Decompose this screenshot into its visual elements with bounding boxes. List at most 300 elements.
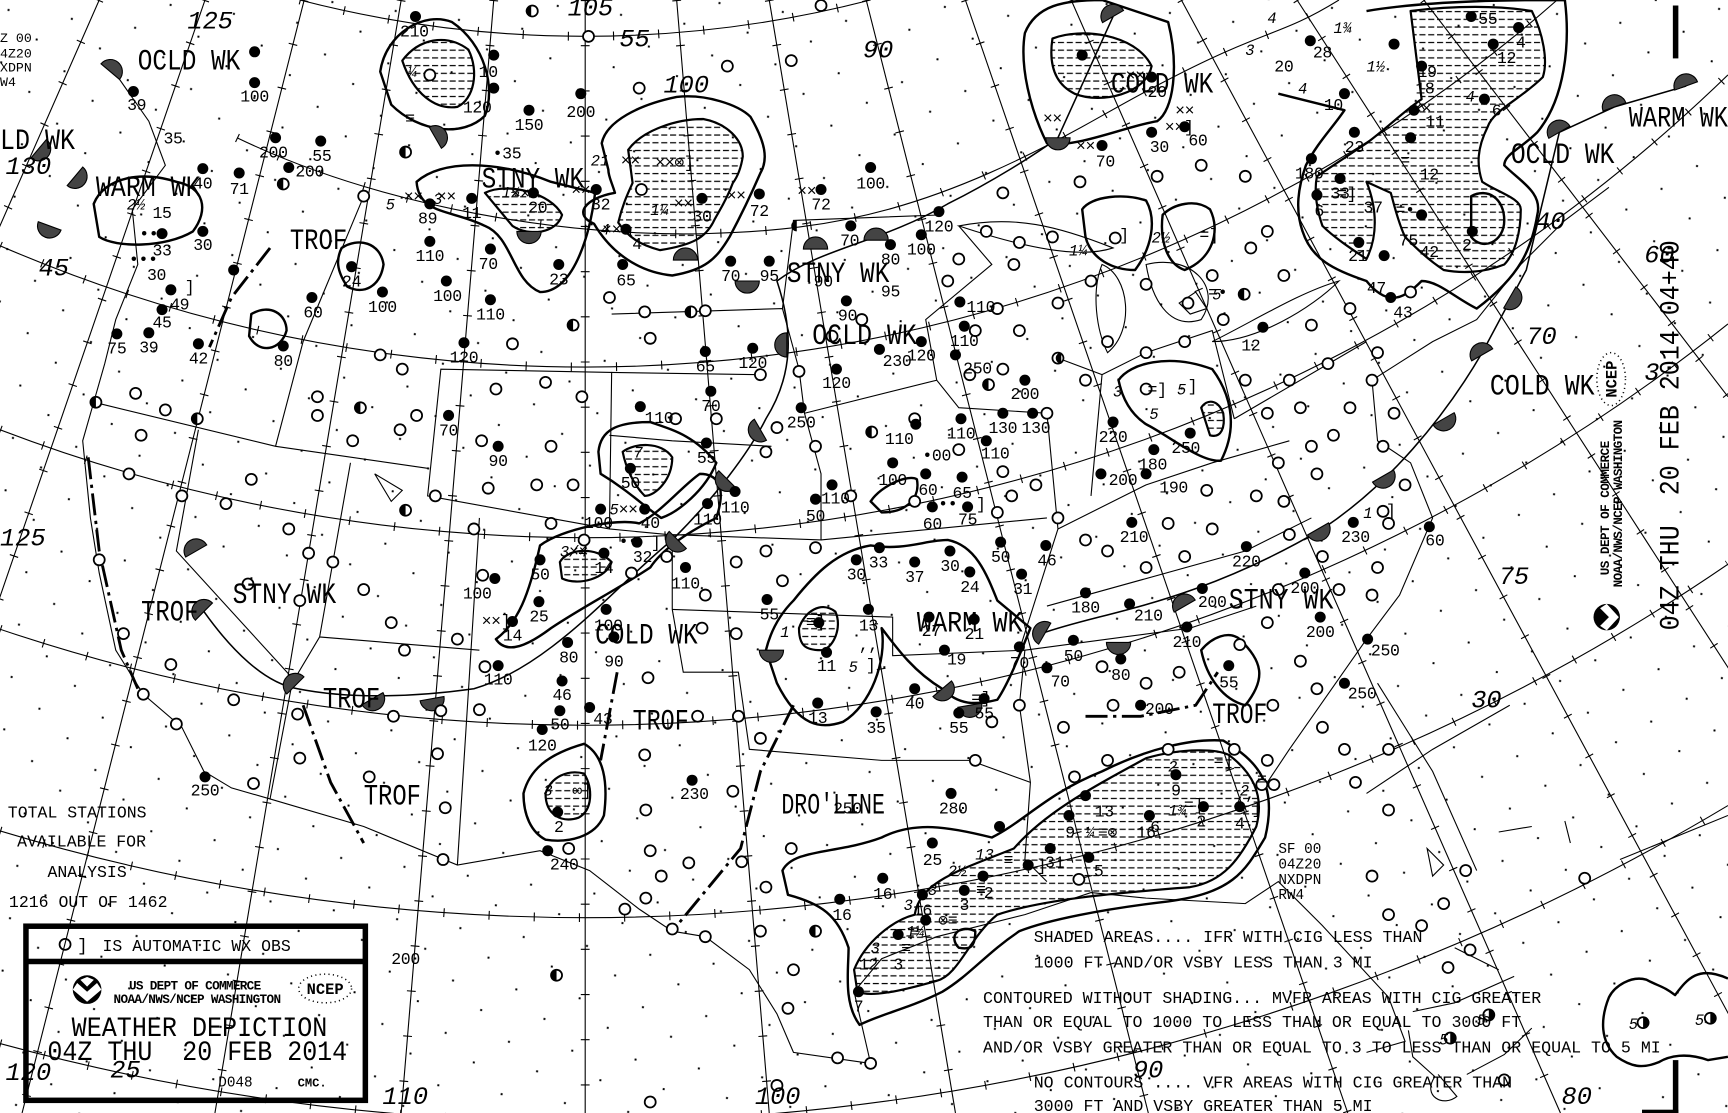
station value labels: 19: [1418, 63, 1437, 82]
station value labels: 23: [549, 270, 568, 289]
map legend notes: AND/OR VSBY GREATER THAN OR EQUAL TO 3 TO LESS THAN OR EQUAL TO 5 MI: [983, 1038, 1661, 1057]
station value labels: 55: [697, 449, 716, 468]
station value labels: 4: [632, 235, 642, 254]
degree labels: 30: [1471, 686, 1502, 715]
station value labels: 20: [528, 199, 547, 218]
weather symbols: ××: [511, 184, 530, 203]
station value labels: 40: [193, 174, 212, 193]
station value labels: 21: [1348, 247, 1368, 266]
small fractional visibility labels: 21: [591, 152, 609, 170]
station value labels: 130: [1022, 419, 1050, 438]
weather symbols: ]: [651, 534, 661, 553]
small fractional visibility labels: 3: [433, 191, 442, 209]
station value labels: 49: [170, 296, 189, 315]
station value labels: 6: [1492, 102, 1501, 121]
station value labels: 110: [721, 498, 749, 517]
stations available text: [8, 804, 167, 912]
station value labels: 75: [958, 511, 977, 530]
station value labels: 65: [952, 484, 972, 503]
station value labels: 240: [550, 855, 579, 874]
station value labels: 70: [701, 397, 720, 416]
station value labels: 30: [1150, 138, 1169, 157]
weather symbols: ××: [727, 187, 746, 206]
station value labels: 80: [274, 352, 293, 371]
small fractional visibility labels: 2½: [1152, 229, 1171, 247]
station value labels: 72: [750, 202, 769, 221]
station value labels: 89: [418, 210, 437, 229]
station value labels: 220: [1232, 552, 1261, 571]
station value labels: 230: [1341, 528, 1370, 547]
weather symbols: ××: [571, 181, 590, 200]
station value labels: 120: [450, 349, 478, 368]
degree labels: 90: [1133, 1057, 1163, 1086]
station value labels: 25: [923, 851, 942, 870]
degree labels: 45: [39, 254, 69, 283]
station value labels: 120: [738, 354, 767, 373]
station value labels: 71: [230, 180, 249, 199]
station value labels: 16: [1137, 824, 1156, 843]
analysis labels: OCLD WK: [138, 44, 240, 78]
station value labels: 55: [975, 704, 994, 723]
station value labels: 60: [1425, 531, 1444, 550]
station value labels: 13: [808, 709, 827, 728]
station value labels: 70: [840, 232, 859, 251]
degree labels: 60: [1644, 241, 1675, 270]
stations available text: 1216 OUT OF 1462: [9, 893, 167, 912]
map legend notes: [983, 928, 1661, 1113]
station value labels: 90: [604, 653, 623, 672]
station value labels: 20: [1148, 83, 1167, 102]
weather symbols: =•: [1395, 201, 1415, 220]
station value labels: 31: [1013, 580, 1033, 599]
station value labels: 16: [832, 906, 852, 925]
station value labels: 210: [400, 22, 429, 41]
degree labels: 130: [6, 153, 51, 182]
station value labels: 40: [905, 695, 924, 714]
analysis labels: TROF: [290, 224, 347, 258]
map legend notes: NO CONTOURS .... VFR AREAS WITH CIG GREATER THAN: [1034, 1074, 1512, 1093]
station value labels: 55: [1478, 10, 1497, 29]
small fractional visibility labels: 2½: [948, 863, 967, 881]
station value labels: 12: [1497, 49, 1516, 68]
weather symbols: [129, 66, 1431, 958]
analysis labels: COLD WK: [1490, 370, 1595, 404]
weather symbols: ××: [621, 151, 640, 170]
station value labels: 110: [476, 306, 505, 325]
station value labels: 42: [189, 350, 208, 369]
rotated agency text: NOAA/NWS/NCEP WASHINGTON: [1611, 420, 1626, 587]
small fractional visibility labels: 2½: [127, 196, 146, 214]
station value labels: 42: [1420, 243, 1439, 262]
small fractional visibility labels: 1½: [1367, 59, 1386, 77]
weather symbols: ]: [1119, 226, 1129, 245]
station value labels: 33: [152, 242, 172, 261]
station value labels: 180: [1295, 165, 1324, 184]
small fractional visibility labels: 7: [634, 444, 644, 462]
station value labels: 70: [721, 267, 740, 286]
weather symbols: ××: [619, 501, 638, 520]
weather symbols: =]: [971, 689, 990, 708]
station value labels: 45: [152, 313, 172, 332]
small fractional visibility labels: 2: [1240, 783, 1249, 801]
weather symbols: ••: [139, 225, 158, 244]
agency text: US DEPT OF COMMERCE: [129, 979, 262, 994]
station value labels: 2: [1196, 812, 1206, 831]
small fractional visibility labels: 2: [1168, 758, 1177, 776]
small fractional visibility labels: 1: [1363, 505, 1372, 523]
station value labels: 7: [854, 998, 863, 1017]
station value labels: 43: [1393, 303, 1412, 322]
small fractional visibility labels: 1¼: [1069, 243, 1087, 261]
degree labels: 120: [6, 1059, 51, 1088]
station value labels: 35: [163, 129, 183, 148]
weather symbols: ,,: [1236, 785, 1255, 804]
rotated agency text: [1598, 420, 1626, 587]
station value labels: 200: [566, 103, 595, 122]
top-left map stamp: 4Z20: [0, 46, 32, 61]
weather symbols: ]: [1386, 502, 1396, 521]
analysis labels: OCLD WK: [1511, 138, 1615, 172]
small fractional visibility labels: 3: [1113, 384, 1122, 402]
weather symbols: ]: [976, 495, 986, 514]
station value labels: 230: [680, 785, 709, 804]
station value labels: 9: [1065, 824, 1075, 843]
station value labels: 39: [139, 339, 158, 358]
station value labels: 250: [787, 414, 816, 433]
station value labels: 13: [1095, 803, 1114, 822]
analysis labels: STNY WK: [787, 257, 889, 291]
weather symbols: ••: [619, 533, 638, 552]
degree labels: 125: [0, 524, 46, 553]
degree labels: 25: [110, 1057, 141, 1086]
station value labels: 210: [1173, 633, 1201, 652]
small fractional visibility labels: 5: [386, 196, 395, 214]
station value labels: 33: [869, 554, 888, 573]
station value labels: 200: [1011, 385, 1039, 404]
small fractional visibility labels: 1¾: [1333, 20, 1353, 38]
station value labels: 70: [1096, 152, 1115, 171]
station value labels: 90: [489, 452, 508, 471]
filled stations: [111, 11, 1524, 997]
weather symbols: ××: [602, 221, 621, 240]
small fractional visibility labels: 4: [1267, 10, 1277, 28]
top-left map stamp: Z 00: [0, 31, 32, 46]
station value labels: 60: [303, 303, 323, 322]
station value labels: 2: [1462, 236, 1472, 255]
station value labels: 55: [949, 719, 968, 738]
station value labels: 24: [342, 273, 362, 292]
small fractional visibility labels: 5: [1439, 1032, 1448, 1050]
weather symbols: ≡: [1004, 851, 1013, 870]
station value labels: 110: [966, 298, 995, 317]
analysis labels: COLD WK: [1111, 68, 1213, 102]
weather symbols: ≡: [910, 923, 919, 942]
station value labels: 110: [693, 511, 722, 530]
station value labels: 30: [193, 236, 212, 255]
degree labels: 90: [863, 36, 893, 65]
station value labels: 55: [760, 605, 779, 624]
station value labels: 190: [1159, 479, 1188, 498]
weather symbols: =: [1400, 151, 1410, 170]
station value labels: 47: [1367, 279, 1386, 298]
station value labels: 110: [885, 430, 914, 449]
station value labels: 180: [1138, 455, 1167, 474]
map legend notes: 1000 FT AND/OR VSBY LESS THAN 3 MI: [1034, 954, 1373, 973]
station value labels: 33: [1330, 184, 1350, 203]
stations available text: ANALYSIS: [47, 863, 127, 882]
station value labels: 110: [947, 425, 975, 444]
station value labels: 50: [806, 507, 825, 526]
station value labels: 100: [584, 514, 613, 533]
small fractional visibility labels: 5: [1212, 287, 1221, 305]
map stamp SF: 04Z20: [1278, 857, 1321, 873]
weather symbols: ××: [569, 542, 588, 561]
station value labels: 12: [859, 956, 878, 975]
chart date: 04Z THU 20 FEB 2014: [47, 1038, 347, 1069]
weather symbols: •••: [129, 250, 158, 269]
map stamp SF: SF 00: [1278, 842, 1321, 858]
small fractional visibility labels: 5: [609, 502, 619, 520]
weather symbols: ××: [1043, 109, 1062, 128]
icon: NOAA logo: [73, 975, 101, 1004]
station value labels: 100: [856, 174, 885, 193]
station value labels: 12: [1241, 336, 1260, 355]
weather symbols: ××: [1076, 137, 1095, 156]
station value labels: 70: [439, 421, 458, 440]
map stamp SF: RW4: [1278, 888, 1304, 904]
station value labels: 110: [645, 409, 673, 428]
station value labels: 70: [479, 255, 498, 274]
station value labels: 200: [295, 162, 324, 181]
rotated chart date: 04Z THU 20 FEB 2014 04+40: [1656, 240, 1687, 630]
station value labels: 24: [960, 578, 980, 597]
station value labels: 46: [1037, 551, 1057, 570]
weather symbols: ≡: [1257, 771, 1267, 790]
station value labels: 70: [1010, 654, 1029, 673]
station value labels: 4: [1516, 33, 1526, 52]
station value labels: 90: [838, 307, 857, 326]
small fractional visibility labels: 4: [601, 222, 610, 240]
analysis labels: OCLD WK: [812, 319, 917, 353]
map legend notes: SHADED AREAS.... IFR WITH CIG LESS THAN: [1034, 928, 1422, 947]
station value labels: 37: [905, 568, 924, 587]
station value labels: 250: [833, 799, 862, 818]
degree labels: 3: [1644, 359, 1659, 388]
weather symbols: ××: [674, 194, 693, 213]
station value labels: 11: [462, 204, 482, 223]
icon: NCEP badge: NCEP: [307, 981, 344, 999]
agency text: NOAA/NWS/NCEP WASHINGTON: [114, 992, 281, 1007]
stations available text: AVAILABLE FOR: [17, 832, 146, 851]
station value labels: 95: [760, 267, 779, 286]
analysis labels: COLD WK: [595, 619, 698, 653]
weather symbols: =•: [1208, 284, 1227, 303]
small fractional visibility labels: ¼: [408, 64, 417, 82]
station value labels: 21: [965, 625, 984, 644]
degree labels: 55: [619, 25, 650, 54]
station value labels: 100: [240, 87, 269, 106]
station value labels: 11: [817, 657, 837, 676]
small fractional visibility labels: 3: [928, 882, 937, 900]
station value labels: 250: [1348, 685, 1376, 704]
station value labels: 120: [463, 98, 492, 117]
weather symbols: =]: [1337, 184, 1356, 203]
weather symbols: ××]: [482, 612, 510, 631]
station value labels: 100: [368, 298, 397, 317]
station value labels: 30: [940, 557, 960, 576]
station value labels: 23: [1345, 138, 1364, 157]
small fractional visibility labels: 1¼: [906, 924, 924, 942]
small fractional visibility labels: 3: [871, 940, 880, 958]
degree labels: 100: [755, 1083, 801, 1112]
station value labels: 150: [515, 116, 543, 135]
station value labels: 15: [152, 204, 172, 223]
degree labels: 75: [1499, 563, 1529, 592]
station value labels: 43: [593, 710, 612, 729]
weather symbols: ]: [1188, 377, 1197, 396]
degree labels: 100: [663, 72, 709, 101]
station value labels: 75: [107, 340, 126, 359]
weather symbols: ,,: [859, 636, 878, 655]
analysis labels: DRO'LINE: [781, 788, 885, 822]
station value labels: 72: [811, 195, 831, 214]
station value labels: 50: [550, 716, 569, 735]
station value labels: 120: [925, 217, 953, 236]
station value labels: 210: [1120, 528, 1148, 547]
station value labels: 11: [1425, 113, 1445, 132]
analysis labels: TROF: [141, 595, 198, 629]
station value labels: 30: [692, 207, 712, 226]
weather symbols: ≡: [901, 939, 911, 958]
weather symbols: ∞]: [572, 782, 591, 801]
analysis labels: TROF: [323, 682, 380, 716]
station value labels: 210: [1134, 606, 1163, 625]
station value labels: 14: [503, 626, 522, 645]
small fractional visibility labels: 5: [1695, 1012, 1704, 1030]
small fractional visibility labels: 5: [1629, 1016, 1638, 1034]
station value labels: 65: [696, 357, 715, 376]
station value labels: 200: [259, 144, 288, 163]
station value labels: 250: [191, 782, 219, 801]
station value labels: 30: [147, 266, 166, 285]
IFR shaded areas: [402, 7, 1545, 994]
station value labels: 3: [893, 956, 903, 975]
analysis labels: TROF: [633, 705, 689, 739]
chart title: WEATHER DEPICTION: [72, 1014, 327, 1045]
station value labels: 100: [463, 584, 492, 603]
station value labels: 9: [1171, 782, 1181, 801]
station value labels: 200: [1198, 593, 1227, 612]
map legend notes: CONTOURED WITHOUT SHADING... MVFR AREAS WITH CIG GREATER: [983, 989, 1541, 1008]
station value labels: 14: [594, 559, 614, 578]
weather symbols: ××: [437, 188, 456, 207]
station value labels: 20: [1274, 58, 1293, 77]
automatic obs key: ]: [77, 937, 88, 957]
map legend notes: THAN OR EQUAL TO 1000 TO LESS THAN OR EQUAL TO 3000 FT: [983, 1013, 1521, 1032]
agency text: [114, 979, 281, 1007]
station value labels: 19: [947, 650, 966, 669]
station value labels: 100: [433, 287, 462, 306]
station value labels: 18: [1415, 80, 1434, 99]
analysis labels: TROF: [364, 779, 421, 813]
station value labels: 37: [1364, 199, 1383, 218]
station value labels: 100: [594, 616, 623, 635]
station value labels: 180: [1071, 599, 1100, 618]
analysis labels: STNY WK: [482, 162, 584, 196]
station value labels: 110: [981, 444, 1010, 463]
weather symbols: ≡: [405, 109, 415, 128]
weather symbols: ]: [185, 278, 194, 297]
small fractional visibility labels: 3: [904, 897, 913, 915]
small fractional visibility labels: 13: [975, 847, 994, 865]
station value labels: 110: [950, 332, 979, 351]
station value labels: 80: [881, 250, 900, 269]
weather symbols: =]: [1148, 381, 1167, 400]
station value labels: 220: [1099, 428, 1127, 447]
weather symbols: ××: [1175, 102, 1194, 121]
legend box: [25, 926, 366, 1100]
station value labels: 13: [859, 616, 878, 635]
weather symbols: ≡: [976, 881, 986, 900]
analysis labels: STNY WK: [1229, 583, 1334, 617]
analysis labels: WARM WK: [917, 606, 1023, 640]
station value labels: 4: [1235, 815, 1245, 834]
station value labels: 50: [991, 548, 1010, 567]
station value labels: 2: [984, 884, 993, 903]
weather symbols: ××]: [1165, 118, 1194, 137]
trough lines: [88, 248, 1218, 931]
rotated agency text: US DEPT OF COMMERCE: [1598, 440, 1613, 575]
station value labels: 130: [988, 419, 1017, 438]
automatic obs key: IS AUTOMATIC WX OBS: [103, 937, 291, 956]
station value labels: 55: [312, 147, 331, 166]
station value labels: 70: [1051, 673, 1070, 692]
analysis labels: LD WK: [0, 124, 75, 158]
station value labels: 60: [1188, 131, 1207, 150]
station value labels: 30: [847, 566, 866, 585]
small fractional visibility labels: 1¾: [1168, 802, 1187, 820]
chart code: D048: [218, 1076, 253, 1092]
station value labels: 10: [479, 63, 498, 82]
station value labels: 28: [1313, 43, 1332, 62]
rotated icon: NCEP badge: NCEP: [1604, 361, 1622, 398]
weather symbols: ]: [866, 656, 875, 675]
analysis labels: STNY WK: [233, 578, 336, 612]
station value labels: 3: [959, 896, 969, 915]
station value labels: 55: [1219, 674, 1238, 693]
map stamp SF: NXDPN: [1278, 873, 1321, 889]
front symbols: hatched fans: [31, 0, 1697, 719]
station value labels: 200: [1290, 579, 1319, 598]
station value labels: 250: [1171, 439, 1200, 458]
station value labels: 60: [918, 481, 938, 500]
small fractional visibility labels: 4: [1298, 81, 1307, 99]
top-left map stamp: W4: [0, 75, 16, 90]
station value labels: 35: [867, 719, 886, 738]
station value labels: 110: [821, 490, 850, 509]
station value labels: 110: [671, 574, 700, 593]
station value labels: 230: [883, 352, 911, 371]
weather symbols: =]: [1199, 226, 1219, 245]
station value labels: 32: [591, 195, 610, 214]
station value labels: 50: [621, 474, 640, 493]
station value labels: 120: [528, 736, 557, 755]
weather symbols: ××: [1412, 100, 1431, 119]
weather symbols: ××: [797, 182, 816, 201]
weather symbols: ××: [404, 188, 423, 207]
weather symbols: ]: [1252, 799, 1261, 818]
station value labels: 27: [922, 622, 941, 641]
